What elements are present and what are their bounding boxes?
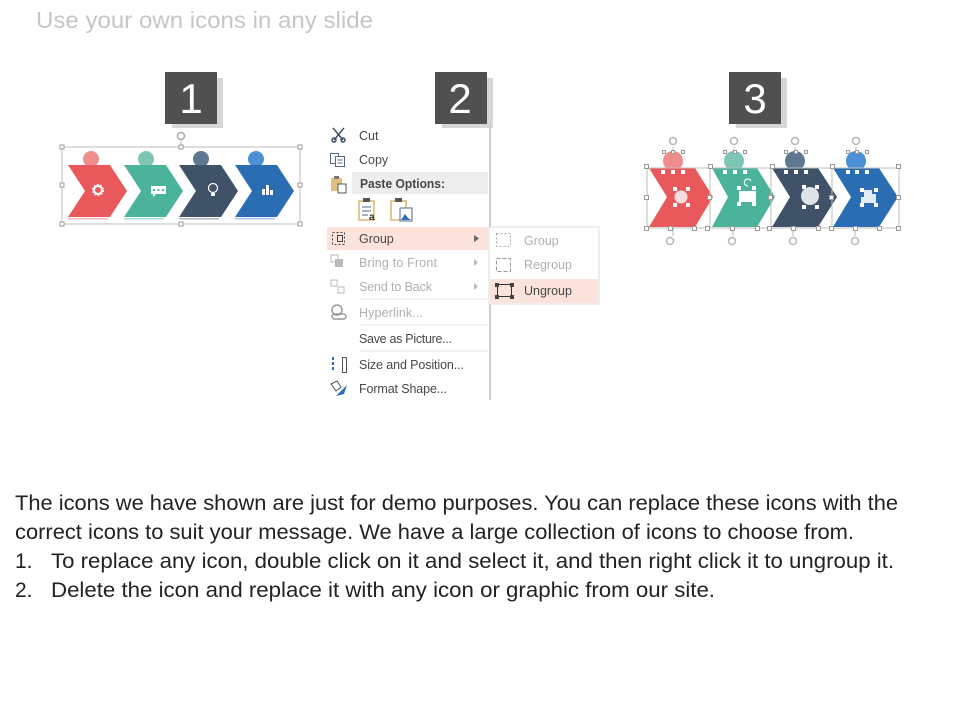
instructions text block: 2. [15, 579, 33, 602]
selection frame with handles [60, 132, 302, 226]
menu labels: Group [359, 232, 394, 246]
menu labels: Size and Position... [359, 358, 464, 372]
step 2 number badge: 2 [448, 75, 472, 122]
panel: grouped chevrons selected [60, 132, 302, 226]
menu labels [359, 129, 464, 396]
selection frames and handles [644, 138, 900, 244]
menu right edge [489, 125, 491, 400]
ungroup highlight [490, 279, 598, 303]
instructions text block: correct icons to suit your message. We have a large collection of icons to choose from. [15, 521, 854, 544]
menu labels: Format Shape... [359, 382, 447, 396]
instructions text block: Delete the icon and replace it with any icon or graphic from our site. [51, 579, 715, 602]
menu labels: Hyperlink... [359, 306, 423, 320]
menu dividers [359, 299, 488, 351]
menu labels: Bring to Front [359, 256, 438, 270]
icon: group [332, 232, 344, 244]
icon: format shape [331, 381, 347, 396]
blue chevron with bar chart icon [235, 151, 294, 220]
menu labels: Copy [359, 153, 389, 167]
menu labels: Send to Back [359, 280, 433, 294]
step 1 number badge: 1 [179, 75, 203, 122]
panel: context menu [327, 125, 491, 400]
red ungrouped chevron [649, 151, 713, 227]
step 1 number badge [165, 72, 223, 128]
instructions text block: 1. [15, 550, 33, 573]
icon: copy [330, 154, 344, 166]
step 3 number badge: 3 [743, 75, 767, 122]
submenu box [489, 227, 599, 304]
icon: hyperlink [332, 305, 346, 319]
navy ungrouped chevron [772, 151, 837, 227]
instructions text block: The icons we have shown are just for demo purposes. You can replace these icons with the [15, 492, 898, 515]
icon: bring to front [331, 255, 343, 267]
step 3 number badge [729, 72, 787, 128]
panel: ungroup submenu [489, 227, 599, 304]
icon: paste clipboard [331, 176, 346, 193]
menu labels: Cut [359, 129, 379, 143]
icon: send to back [331, 280, 344, 293]
panel: ungrouped chevrons [644, 138, 900, 244]
submenu labels: Regroup [524, 258, 572, 272]
submenu labels: Group [524, 234, 559, 248]
red chevron with gear icon [68, 151, 127, 220]
instructions text block [15, 492, 898, 602]
green chevron with speech bubble icon [124, 151, 183, 220]
step 2 number badge [435, 72, 493, 128]
title: Use your own icons in any slide [36, 7, 373, 33]
menu labels: Paste Options: [360, 177, 445, 191]
navy chevron with light bulb icon [179, 151, 238, 220]
submenu labels: Ungroup [524, 284, 572, 298]
icon: paste as picture [391, 198, 412, 221]
submenu labels [524, 234, 572, 298]
group highlight row [327, 227, 488, 250]
icon: paste keep text: a [369, 212, 375, 223]
green ungrouped chevron [712, 151, 775, 227]
blue ungrouped chevron [833, 151, 898, 227]
icon: scissors [332, 128, 345, 142]
paste options band [352, 172, 488, 194]
submenu icons [495, 234, 514, 299]
menu labels: Save as Picture... [359, 332, 452, 346]
submenu arrows [474, 235, 479, 290]
instructions text block: To replace any icon, double click on it and select it, and then right click it to ungroup it. [51, 550, 894, 573]
icon: size and position [333, 357, 346, 372]
icon: paste keep text [359, 198, 375, 223]
